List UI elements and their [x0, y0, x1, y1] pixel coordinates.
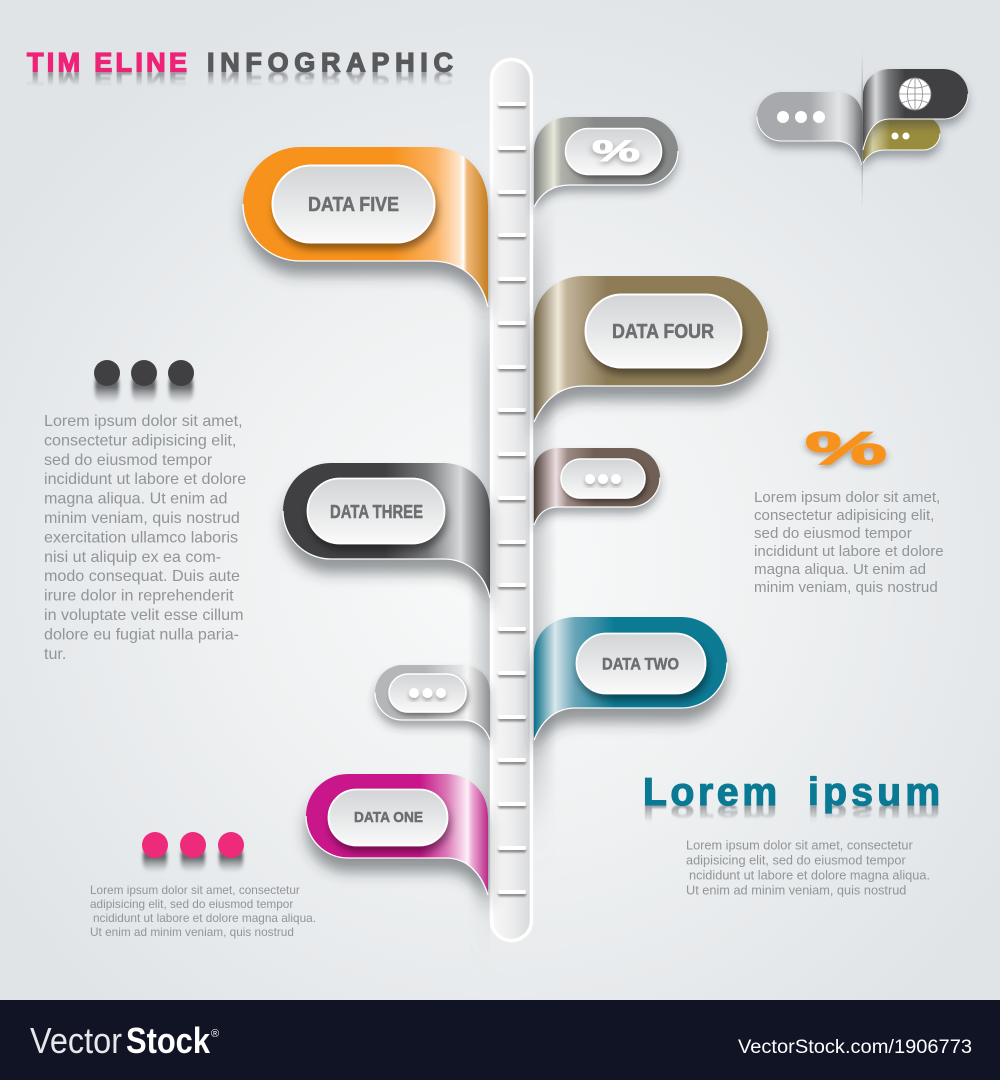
text block: left: exercitation ullamco laboris — [44, 528, 238, 546]
footer logo — [30, 1020, 219, 1061]
text block: right: sed do eiusmod tempor — [754, 525, 912, 542]
title — [27, 48, 453, 89]
heading: lorem ipsum: ipsum — [808, 771, 940, 814]
flag: percent: % — [592, 134, 640, 168]
text block: right — [754, 489, 944, 596]
text block: left: incididunt ut labore et dolore — [44, 470, 246, 488]
text block: left: magna aliqua. Ut enim ad — [44, 490, 227, 508]
heading: lorem ipsum: Lorem — [643, 800, 777, 826]
text block: left: Lorem ipsum dolor sit amet, — [44, 412, 243, 430]
text block: right: minim veniam, quis nostrud — [754, 579, 938, 596]
timeline pillar — [468, 60, 557, 940]
icon: three dots — [585, 474, 621, 484]
text block: left: modo consequat. Duis aute — [44, 567, 240, 585]
flag: small grey — [375, 665, 490, 740]
flag: small brown — [534, 448, 660, 525]
flag: data five — [243, 147, 488, 307]
text block: bottom left: Ut enim ad minim veniam, quis nostrud — [90, 925, 294, 939]
flag: data four — [534, 276, 768, 422]
icon group: speech flags with globe — [757, 50, 968, 208]
text block: bottom left: Lorem ipsum dolor sit amet, consectetur — [90, 883, 300, 897]
text block: right: Lorem ipsum dolor sit amet, — [754, 489, 940, 506]
flag: data four: DATA FOUR — [612, 321, 714, 343]
flag: data five: DATA FIVE — [308, 194, 399, 216]
text block: left: consectetur adipisicing elit, — [44, 431, 236, 449]
icon: three dots — [409, 688, 446, 698]
flag: data three — [283, 463, 490, 598]
text block: right: consectetur adipisicing elit, — [754, 507, 934, 524]
flag: data one — [306, 774, 488, 895]
text block: left: minim veniam, quis nostrud — [44, 509, 240, 527]
text block: left: sed do eiusmod tempor — [44, 451, 213, 469]
text block: bottom left: ncididunt ut labore et dolore magna aliqua. — [93, 911, 316, 925]
percent symbol: orange: % — [805, 423, 887, 474]
heading: lorem ipsum: ipsum — [808, 800, 940, 826]
footer logo: Stock — [126, 1020, 211, 1061]
text block: bottom right: Lorem ipsum dolor sit amet, consectetur — [686, 838, 914, 852]
flag: data one: DATA ONE — [354, 809, 423, 826]
text block: bottom left: adipisicing elit, sed do eiusmod tempor — [90, 897, 293, 911]
heading: lorem ipsum — [643, 771, 940, 826]
title: INFOGRAPHIC — [207, 48, 453, 78]
flag: percent — [534, 117, 678, 207]
footer logo: ® — [211, 1028, 219, 1040]
text block: bottom right — [686, 838, 930, 898]
text block: left: in voluptate velit esse cillum — [44, 606, 243, 624]
text block: bottom right: adipisicing elit, sed do eiusmod tempor — [686, 852, 906, 868]
text block: right: incididunt ut labore et dolore — [754, 543, 944, 560]
icon: globe — [899, 78, 931, 110]
title: TIM ELINE — [27, 48, 187, 78]
flag: data two: DATA TWO — [602, 654, 679, 674]
heading: lorem ipsum: Lorem — [643, 771, 777, 814]
dark dots — [94, 360, 194, 404]
text block: bottom right: Ut enim ad minim veniam, quis nostrud — [686, 882, 906, 898]
text block: left: irure dolor in reprehenderit — [44, 587, 234, 605]
pink dots — [142, 832, 244, 873]
text block: left — [44, 412, 246, 663]
text block: left: tur. — [44, 645, 66, 663]
flag: data two — [534, 617, 727, 740]
flag: data three: DATA THREE — [330, 502, 423, 522]
text block: bottom left — [90, 883, 316, 939]
footer url: VectorStock.com/1906773 — [738, 1037, 972, 1058]
footer logo: Vector — [30, 1020, 122, 1061]
text block: bottom right: ncididunt ut labore et dolore magna aliqua. — [689, 868, 930, 882]
title: INFOGRAPHIC — [207, 68, 453, 89]
text block: left: dolore eu fugiat nulla paria- — [44, 625, 239, 643]
title: TIM ELINE — [27, 68, 187, 89]
text block: left: nisi ut aliquip ex ea com- — [44, 548, 221, 566]
footer bar — [0, 1000, 1000, 1080]
text block: right: magna aliqua. Ut enim ad — [754, 561, 926, 578]
